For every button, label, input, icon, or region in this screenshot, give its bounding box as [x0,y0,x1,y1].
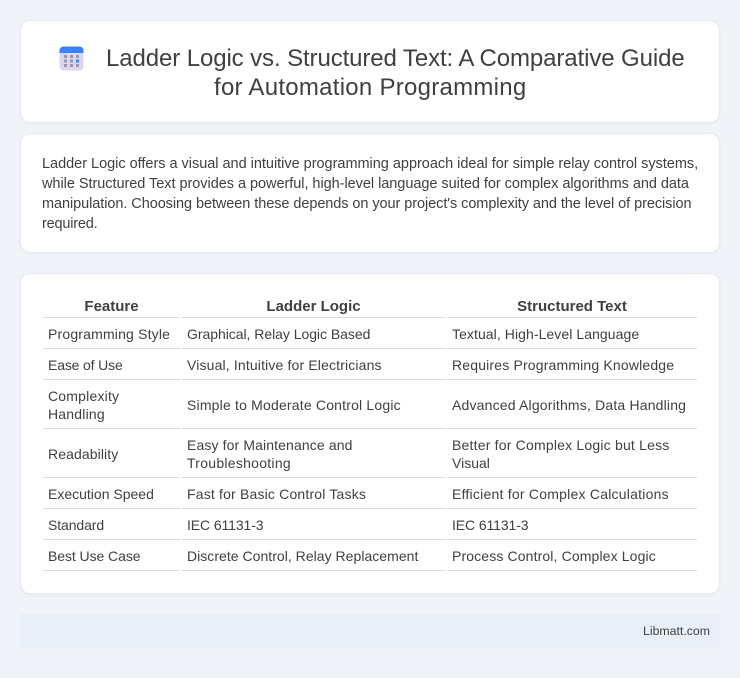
row: complexity handling: Handling [48,406,105,422]
footer text: Libmatt.com [643,624,710,638]
row: best use case: Best Use Case [48,548,140,564]
table header: Structured Text [517,298,627,315]
row: readability [48,437,669,471]
row: standard: Standard [48,517,104,533]
panel: intro card [20,133,720,253]
row: execution speed: Fast for Basic Control Tasks [187,486,366,502]
row: standard: IEC 61131-3 [452,517,528,533]
row: readability: Visual [452,455,490,471]
row: complexity handling: Complexity [48,388,119,404]
row: readability: Troubleshooting [187,455,291,471]
row: programming style: Textual, High-Level Language [452,326,639,342]
footer bar [20,614,720,648]
heading: title line 1: Ladder Logic vs. Structured Text: A Comparative Guide [106,45,685,72]
row: ease of use: Requires Programming Knowledge [452,357,674,373]
row: programming style: Graphical, Relay Logic Based [187,326,370,342]
row: readability: Better for Complex Logic but Less [452,437,669,453]
table header: Feature [84,298,139,315]
row: ease of use [48,357,674,373]
comparison table [43,298,697,571]
panel: comparison table card [20,273,720,594]
row: complexity handling [48,388,686,422]
row: execution speed: Execution Speed [48,486,154,502]
row: execution speed [48,486,669,502]
row: programming style [48,326,639,342]
row: best use case: Discrete Control, Relay Replacement [187,548,418,564]
row: standard [48,517,528,533]
row: programming style: Programming Style [48,326,170,342]
table header: Ladder Logic [266,298,361,315]
icon: calendar grid [60,46,84,70]
row: readability: Easy for Maintenance and [187,437,353,453]
row: readability: Readability [48,446,118,462]
heading: title line 2: for Automation Programming [214,74,526,101]
row: standard: IEC 61131-3 [187,517,263,533]
table header [84,298,627,315]
text block: intro paragraph: manipulation. Choosing between these depends on your project's complexity and the level of precision [42,196,691,212]
row: complexity handling: Simple to Moderate Control Logic [187,397,401,413]
text block: intro paragraph [42,156,698,232]
row: ease of use: Visual, Intuitive for Electricians [187,357,382,373]
row: complexity handling: Advanced Algorithms, Data Handling [452,397,686,413]
row: ease of use: Ease of Use [48,357,123,373]
text block: intro paragraph: while Structured Text provides a powerful, high-level language suited for complex algorithms and data [42,176,689,192]
panel: title card [20,20,720,123]
row: execution speed: Efficient for Complex Calculations [452,486,669,502]
row: best use case [48,548,656,564]
row: best use case: Process Control, Complex Logic [452,548,656,564]
text block: intro paragraph: required. [42,216,97,232]
text block: intro paragraph: Ladder Logic offers a visual and intuitive programming approach ideal for simple relay control systems, [42,156,698,172]
